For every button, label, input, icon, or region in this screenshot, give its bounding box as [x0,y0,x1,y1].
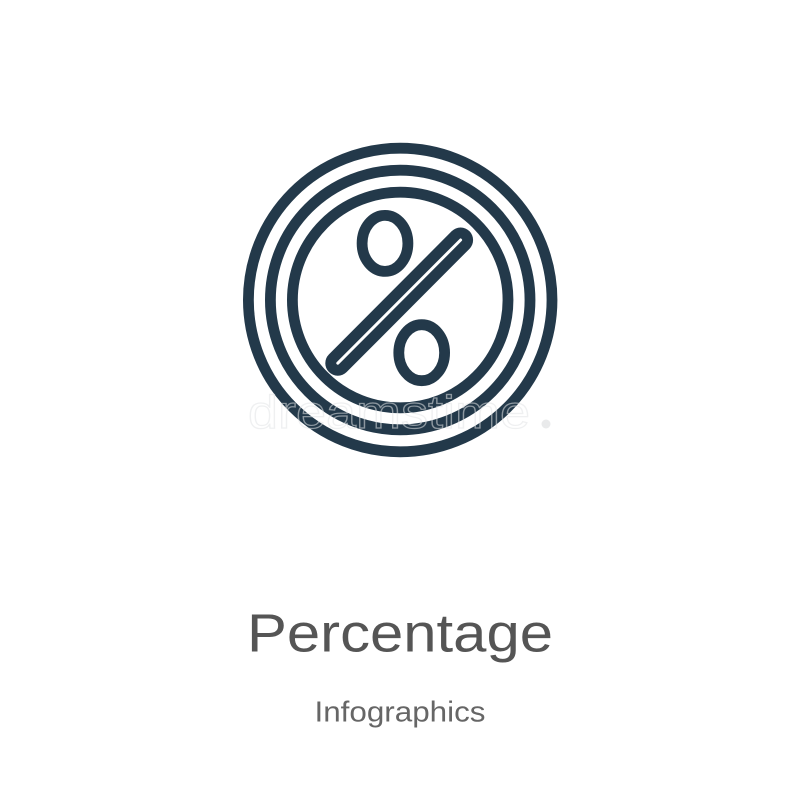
middle ring [270,170,530,430]
outer ring [248,148,552,452]
watermark: dreamstime [248,386,530,438]
percent slash [338,240,461,363]
icon: percentage in concentric circles [248,148,552,452]
title: Percentage [247,604,553,664]
subtitle: Infographics [314,697,486,729]
percent bottom oval [399,325,445,381]
percent top oval [362,215,408,271]
inner ring [292,192,508,408]
